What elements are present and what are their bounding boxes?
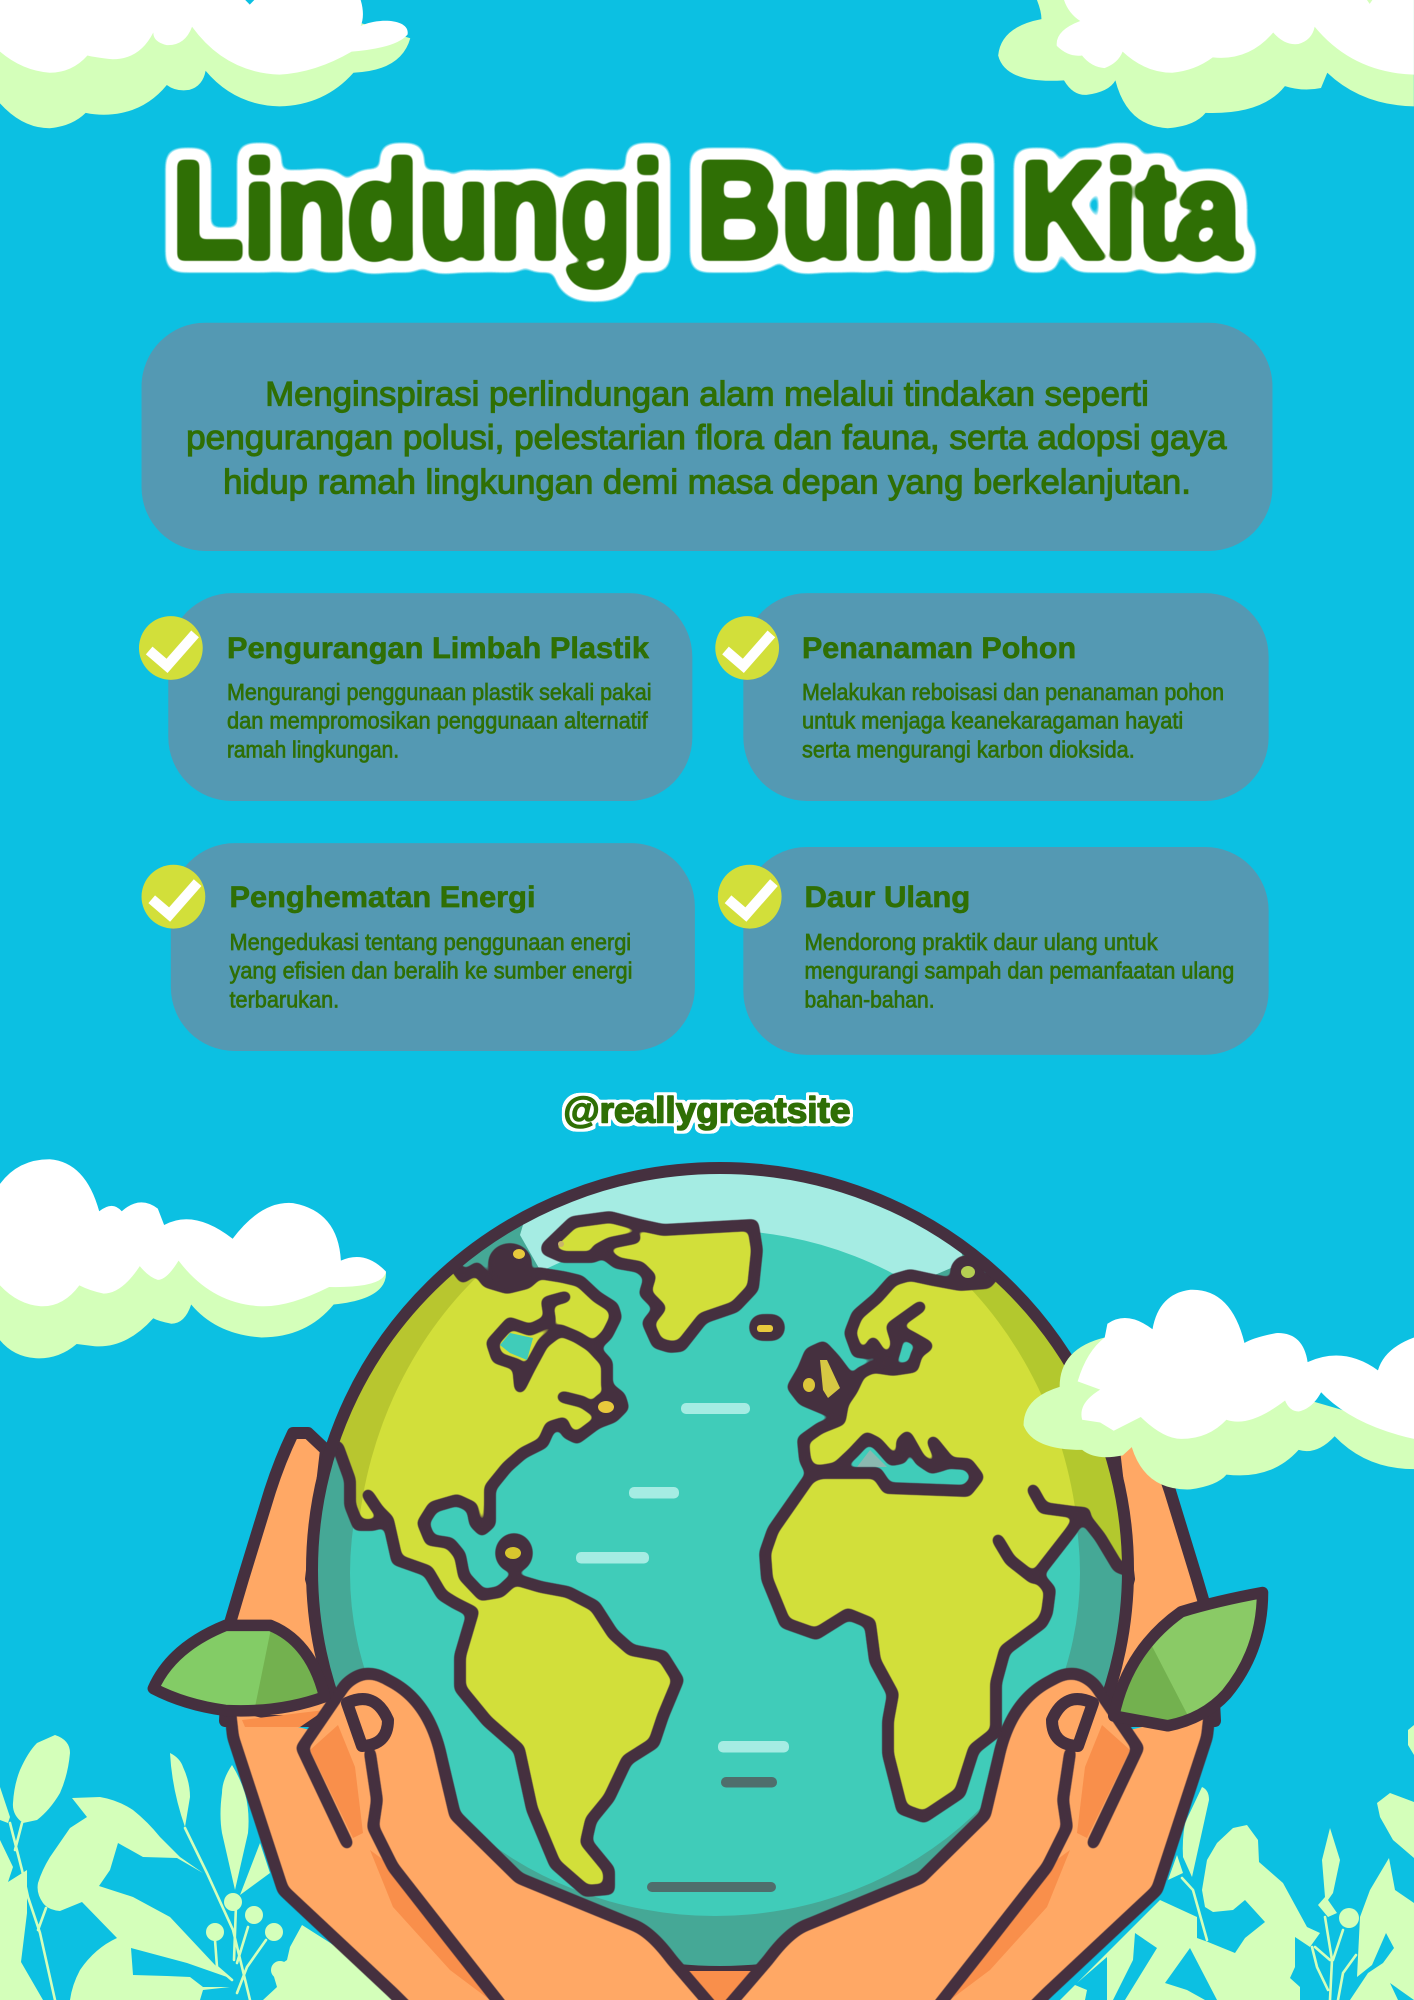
panel: Penanaman Pohon [715, 593, 1269, 801]
leaf: right [1114, 1593, 1263, 1726]
body text: Melakukan reboisasi dan penanaman pohon [802, 679, 1224, 705]
body text: serta mengurangi karbon dioksida. [802, 737, 1135, 763]
icon: check badge [715, 616, 779, 680]
illustration: plants, hands, globe, clouds [0, 1159, 1414, 2000]
body text: mengurangi sampah dan pemanfaatan ulang [805, 957, 1234, 983]
website handle: @reallygreatsite [564, 1090, 850, 1130]
heading: Penanaman Pohon [802, 632, 1076, 665]
icon: check badge [139, 616, 203, 680]
cloud: middle right [1024, 1290, 1414, 1489]
body text: bahan-bahan. [805, 987, 935, 1013]
body text: ramah lingkungan. [227, 737, 399, 763]
body text: yang efisien dan beralih ke sumber energi [230, 957, 632, 983]
cloud: top left [0, 0, 410, 128]
hand: front left [230, 1674, 715, 2000]
body text: untuk menjaga keanekaragaman hayati [802, 707, 1183, 733]
plants: bottom left [0, 1735, 420, 2000]
globe [312, 1168, 1160, 1972]
body text: Mengurangi penggunaan plastik sekali pakai [227, 679, 652, 705]
heading: Penghematan Energi [230, 881, 536, 914]
plants: bottom right [1060, 1725, 1414, 2000]
body text [802, 679, 1224, 763]
body text: Mendorong praktik daur ulang untuk [805, 929, 1158, 955]
intro text: Menginspirasi perlindungan alam melalui tindakan seperti [265, 376, 1149, 414]
hand: front right [725, 1674, 1210, 2000]
thumb [347, 1699, 388, 1746]
heading: Daur Ulang [805, 881, 970, 914]
body text: dan mempromosikan penggunaan alternatif [227, 707, 648, 733]
intro text: pengurangan polusi, pelestarian flora dan fauna, serta adopsi gaya [186, 419, 1227, 457]
lakes and islands [500, 1241, 975, 1559]
panel: Pengurangan Limbah Plastik [139, 593, 692, 801]
intro text: hidup ramah lingkungan demi masa depan yang berkelanjutan. [223, 464, 1191, 502]
cloud: middle left [0, 1159, 386, 1358]
body text [227, 679, 652, 763]
ocean dashes [576, 1403, 789, 1892]
sea tint [857, 1450, 887, 1467]
cloud: top right [998, 0, 1414, 128]
leaf: left [153, 1625, 325, 1711]
body text [230, 929, 632, 1013]
title: Lindungi Bumi Kita [172, 134, 1242, 288]
body text: terbarukan. [230, 987, 339, 1013]
wrist gap [685, 1971, 753, 2000]
intro text [186, 376, 1227, 502]
leaves and clouds layer [0, 1159, 1414, 1726]
body text: Mengedukasi tentang penggunaan energi [230, 929, 631, 955]
panel: intro [142, 323, 1272, 551]
thumb [1052, 1699, 1093, 1746]
panel: Daur Ulang [718, 847, 1269, 1055]
heading: Pengurangan Limbah Plastik [227, 632, 650, 665]
body text [805, 929, 1234, 1013]
icon: check badge [142, 865, 205, 929]
continents: fills [315, 1217, 1160, 1891]
continents: coastlines [315, 1217, 1160, 1891]
globe outline [312, 1168, 1128, 1972]
globe base and shading [312, 1168, 1128, 1972]
hand: back fingers right [1088, 1433, 1215, 1721]
hand: back fingers left [225, 1433, 352, 1721]
icon: check badge [718, 865, 782, 929]
panel: Penghematan Energi [142, 843, 695, 1051]
